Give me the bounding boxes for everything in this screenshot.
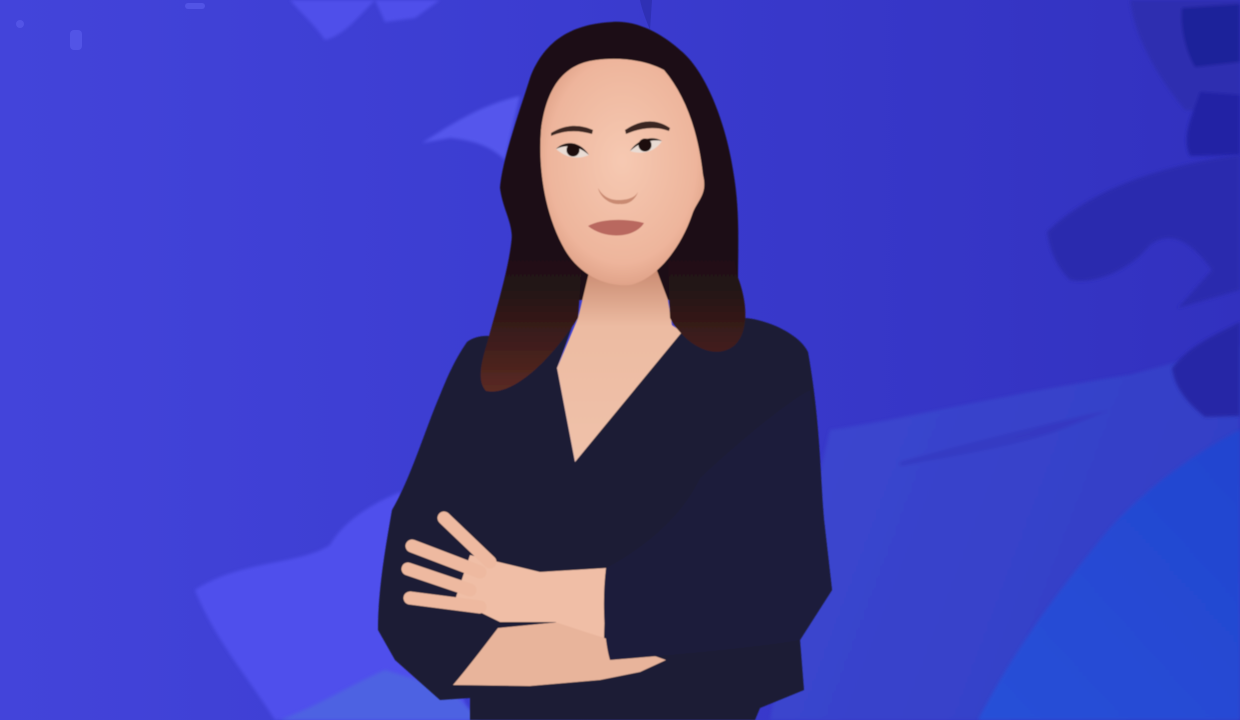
brush: right dark blot [1172,322,1240,417]
brush: top centre dark stroke [640,0,652,30]
brush: mid light stroke [422,96,520,160]
brush: right dark stroke [1047,155,1240,308]
brush: bottom right blue corner [978,430,1240,720]
brush: top centre light stroke [290,0,440,40]
hair: lower right lock [668,200,745,352]
nose shadow [598,188,638,204]
brush: bottom left light stroke [195,492,470,720]
brush: lower right lighter area [770,345,1240,720]
far forearm [453,622,666,686]
hand and near forearm [408,518,606,638]
brush: small specks [16,3,205,50]
brush: bottom left pale stroke [280,670,480,720]
right sleeve [604,390,832,660]
lips [588,220,644,235]
eyebrows [551,121,670,136]
person [378,22,832,720]
hair: back [500,22,738,300]
hair: lower left lock [481,200,582,392]
face [540,59,704,285]
brush: top right dark strokes [1130,0,1240,156]
eyes [556,138,662,158]
dress: torso and skirt [378,310,832,720]
neck and chest [557,268,682,462]
